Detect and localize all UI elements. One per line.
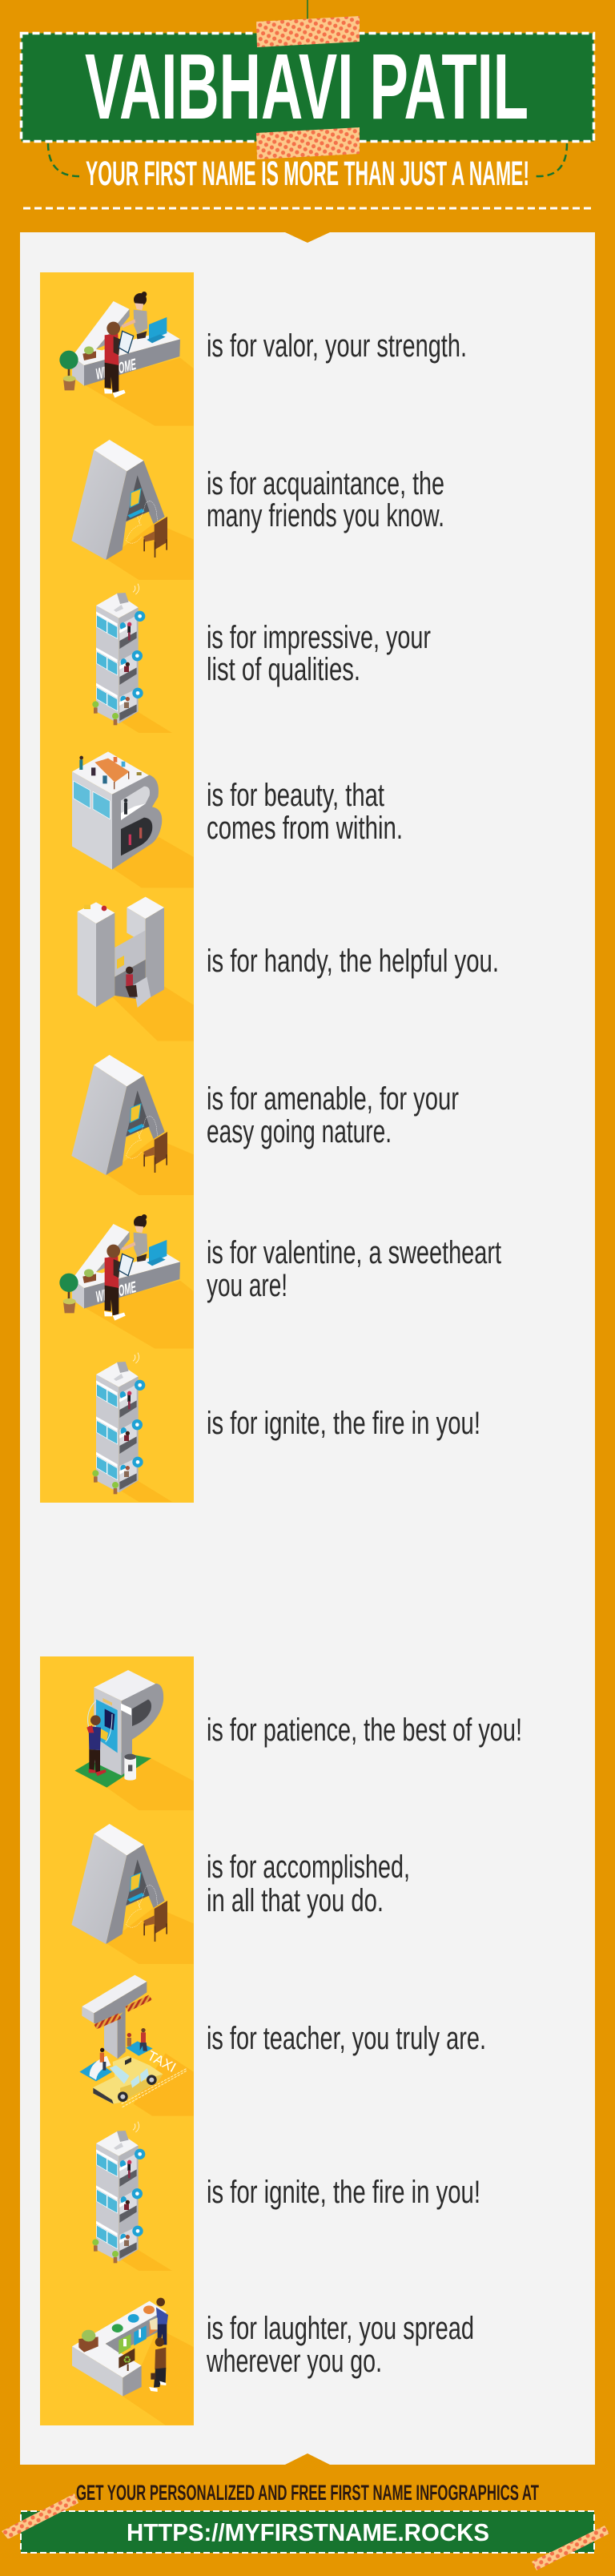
text: laughter: wherever you go. <box>206 2344 382 2379</box>
text: acquaintance: many friends you know. <box>207 498 444 533</box>
row: L laughter <box>72 2298 474 2425</box>
row: A acquaintance <box>71 440 444 580</box>
footer url banner <box>21 2511 594 2553</box>
icon: letter V reception desk <box>59 1214 194 1349</box>
row: H handy <box>78 897 499 1041</box>
icon: letter L recycling counter: ♻ <box>123 2354 131 2365</box>
row: T teacher <box>79 1975 486 2116</box>
icon: letter P ATM <box>74 1670 194 1810</box>
footer <box>2 2481 609 2570</box>
icon: letter I office tower <box>92 1353 172 1502</box>
panel: yellow column first name <box>40 272 194 1503</box>
tape: top <box>256 16 360 47</box>
text: accomplished: in all that you do. <box>207 1883 384 1918</box>
tape: footer right <box>532 2526 609 2570</box>
footer url banner: HTTPS://MYFIRSTNAME.ROCKS <box>127 2518 489 2546</box>
text: beauty: is for beauty, that <box>207 778 384 813</box>
text: laughter: is for laughter, you spread <box>207 2311 474 2346</box>
tape: footer left <box>2 2493 78 2539</box>
text: acquaintance: is for acquaintance, the <box>207 466 444 501</box>
text: amenable: is for amenable, for your <box>207 1081 459 1117</box>
text: impressive <box>207 620 431 687</box>
text: teacher: is for teacher, you truly are. <box>207 2021 486 2056</box>
icon: letter I office tower <box>92 2122 172 2271</box>
icon: letter I office tower <box>92 584 172 733</box>
icon: letter T taxi stand <box>79 1975 194 2116</box>
icon: letter H office <box>78 897 194 1041</box>
text: valor: is for valor, your strength. <box>207 328 467 364</box>
header banner <box>21 0 594 159</box>
text: laughter <box>206 2311 474 2379</box>
text: accomplished <box>207 1849 410 1918</box>
icon: letter A desk <box>71 1055 194 1195</box>
text: beauty <box>207 778 403 846</box>
text: impressive: list of qualities. <box>207 652 360 687</box>
text: valentine: is for valentine, a sweetheart <box>207 1235 501 1270</box>
text: accomplished: is for accomplished, <box>207 1849 410 1885</box>
bracket: left <box>48 143 82 176</box>
panel: yellow column last name <box>40 1656 194 2425</box>
text: ignite: is for ignite, the fire in you! <box>207 1406 480 1441</box>
icon: letter L recycling counter <box>72 2298 194 2425</box>
row: P patience <box>74 1670 522 1810</box>
tape: bottom <box>256 127 360 159</box>
text: beauty: comes from within. <box>207 811 403 846</box>
row: I impressive <box>92 584 431 733</box>
text: amenable <box>207 1081 459 1149</box>
row: I ignite <box>92 2122 480 2271</box>
icon: letter B building <box>72 751 194 888</box>
text: valentine: you are! <box>207 1268 287 1303</box>
row: A accomplished <box>71 1824 410 1964</box>
text: acquaintance <box>207 466 444 533</box>
icon: letter T taxi stand: TAXI <box>145 2047 179 2075</box>
text: handy: is for handy, the helpful you. <box>207 944 499 979</box>
row: B beauty <box>72 751 403 888</box>
icon: letter A desk <box>71 1824 194 1964</box>
icon: letter A desk <box>71 440 194 580</box>
row: V valentine <box>59 1214 501 1349</box>
row: I ignite <box>92 1353 480 1502</box>
bracket: right <box>536 143 567 176</box>
text: amenable: easy going nature. <box>207 1114 392 1149</box>
icon: letter V reception desk <box>59 292 194 426</box>
row: A amenable <box>71 1055 459 1195</box>
text: ignite: is for ignite, the fire in you! <box>207 2175 480 2210</box>
text: valentine <box>207 1235 501 1303</box>
text: impressive: is for impressive, your <box>207 620 431 655</box>
row: V valor <box>59 292 467 426</box>
